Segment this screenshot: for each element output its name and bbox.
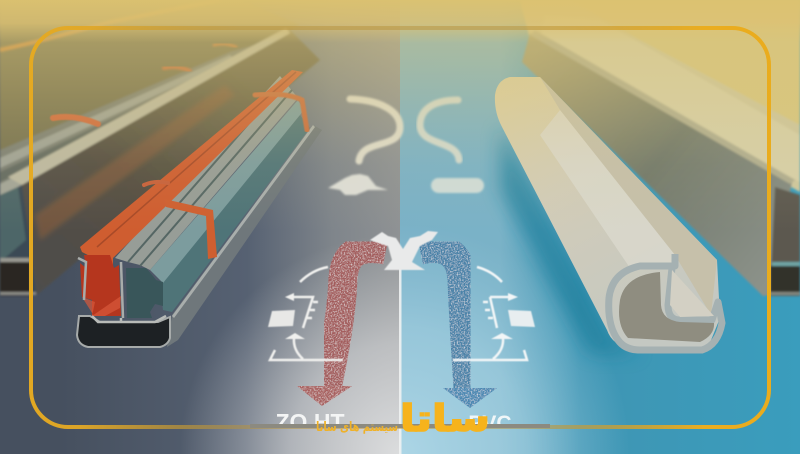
right background profiles [520, 0, 800, 296]
aluminium profile [77, 70, 322, 347]
base bracket [270, 350, 343, 360]
label: ZO HT: ZO HT [276, 409, 344, 435]
center floor marks [342, 99, 480, 161]
rail channel [77, 316, 170, 347]
left faint bar [342, 114, 372, 120]
up arrow [493, 338, 503, 359]
arrow head: blue [443, 388, 497, 408]
bottom rail side [167, 125, 322, 347]
red top strip [80, 70, 303, 268]
footer strip [250, 424, 550, 428]
icon: left cloud symbol [328, 174, 388, 195]
PVC shadow [500, 125, 640, 354]
grey ribs [115, 76, 298, 270]
PVC inner cavity [619, 272, 714, 342]
comb icon [268, 310, 295, 327]
orange clips on background profile [0, 0, 236, 124]
PVC upright lip [540, 77, 717, 315]
up arrow [294, 338, 303, 359]
arrowhead right [508, 293, 518, 301]
lower teal face [160, 115, 310, 312]
PVC front face [609, 254, 722, 350]
arrow: red flow [327, 248, 386, 388]
red cell [80, 255, 121, 316]
right faint bar [442, 114, 480, 120]
arrow with ticks [292, 297, 318, 328]
label: PVC: PVC [468, 412, 512, 435]
up arrowhead [491, 333, 513, 339]
arrow head: red [297, 386, 352, 406]
arrowhead left [285, 293, 294, 301]
PVC body [495, 77, 720, 350]
arc [300, 267, 328, 282]
left white diagram [268, 267, 343, 360]
right white diagram [453, 267, 535, 360]
icon: center Y merge [370, 231, 438, 270]
arrow: blue flow [420, 249, 468, 388]
upper teal face [150, 100, 304, 283]
atmospheric top glow [0, 0, 800, 330]
icon: right pill symbol [431, 178, 484, 193]
logo: small tagline: سیستم های ساتا [316, 420, 398, 435]
cell divider [78, 258, 123, 318]
orange strap near [164, 199, 217, 259]
arrow with ticks [483, 297, 510, 328]
PVC profile [495, 77, 722, 354]
teal cell [126, 268, 163, 318]
orange strap far [255, 94, 307, 130]
up arrowhead [285, 333, 305, 339]
logo: wordmark: ساتا [400, 397, 490, 440]
arc [477, 267, 502, 282]
right curved route mark [420, 100, 459, 160]
left background profile [0, 0, 320, 296]
orange strap small arc [144, 182, 168, 185]
left curved route mark [350, 99, 400, 161]
comb icon [508, 310, 535, 327]
base bracket [453, 350, 527, 360]
